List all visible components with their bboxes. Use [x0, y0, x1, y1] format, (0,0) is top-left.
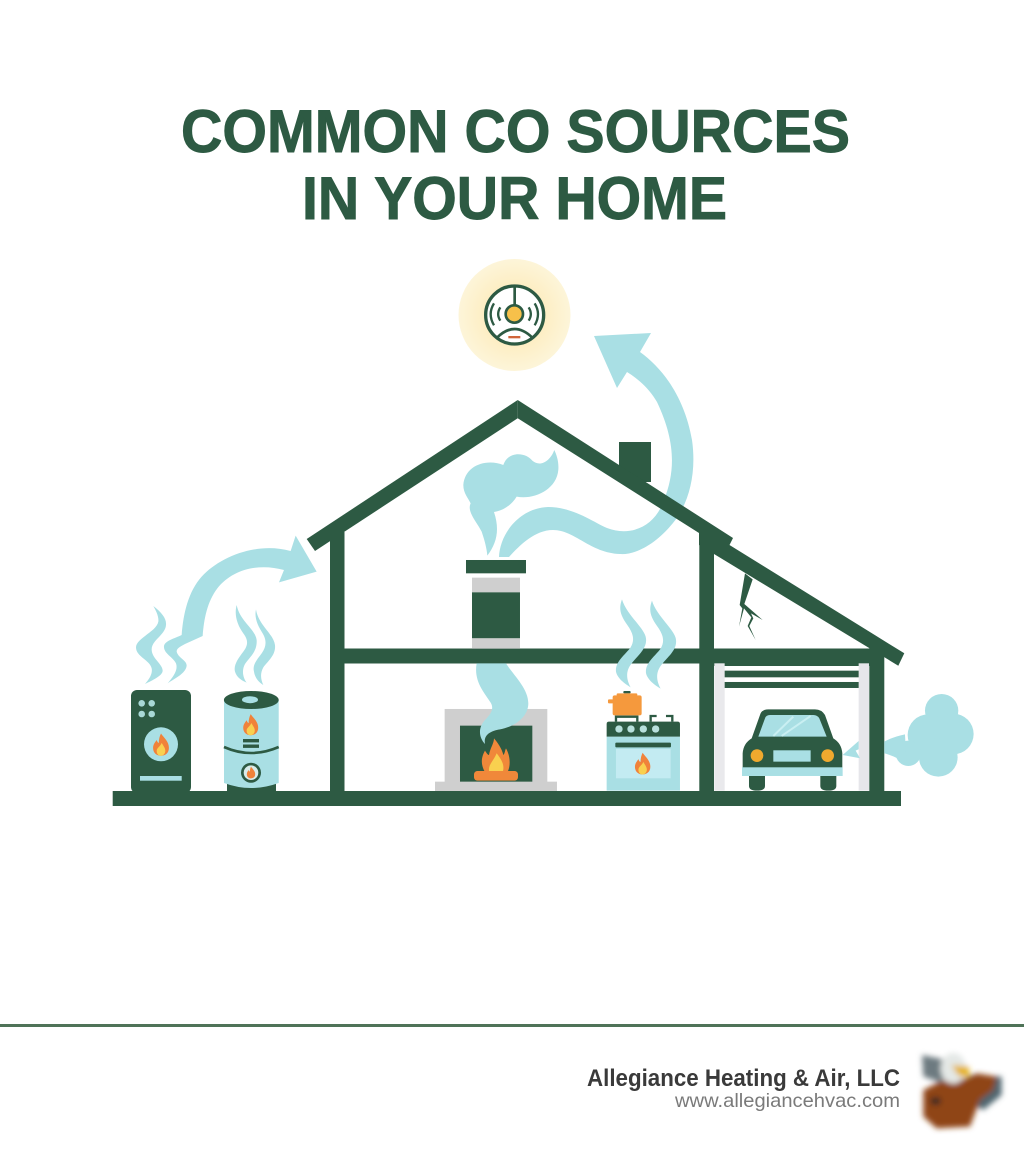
footer website: www.allegiancehvac.com	[674, 1090, 900, 1112]
logo: eagle mascot	[922, 1053, 1002, 1128]
upper floor: garage	[712, 648, 882, 666]
wall: middle	[699, 533, 714, 795]
roof: left slope	[307, 400, 518, 551]
ground line	[113, 791, 901, 806]
wall: left	[330, 532, 344, 797]
oven flame	[635, 753, 650, 774]
fire and log	[474, 738, 518, 781]
stove steam	[616, 599, 676, 689]
arrow: smoke ribbon rising out of the chimney	[499, 333, 693, 557]
house frame	[113, 400, 904, 806]
stove with pot	[607, 599, 680, 791]
garage door	[714, 663, 869, 791]
wall: right	[869, 648, 884, 793]
car	[742, 709, 843, 791]
roof: right slope with garage extension	[518, 400, 904, 666]
cooktop	[607, 722, 680, 737]
chimney stack	[619, 442, 651, 482]
footer divider	[0, 1024, 1024, 1027]
footer company name: Allegiance Heating & Air, LLC	[587, 1065, 900, 1092]
upper-floor flue with hood	[466, 560, 526, 649]
title: COMMON CO SOURCES	[181, 98, 850, 165]
pot	[613, 695, 642, 715]
steam: furnace wisp	[136, 606, 166, 684]
smoke rising from the fire	[476, 663, 528, 744]
smoke cloud in attic	[463, 450, 558, 556]
wall crack	[739, 573, 763, 640]
title	[181, 98, 850, 232]
steam: water heater wisps	[235, 605, 275, 685]
icon: CO detector with glow	[458, 259, 570, 371]
title: IN YOUR HOME	[302, 165, 727, 232]
exhaust cloud	[843, 694, 974, 777]
furnace	[131, 690, 191, 793]
oven body	[607, 737, 680, 791]
water heater	[224, 691, 279, 791]
arrow: fumes from furnace entering the house	[164, 536, 317, 683]
burner grates	[616, 716, 672, 722]
fireplace	[435, 663, 557, 791]
upper floor	[340, 648, 715, 664]
